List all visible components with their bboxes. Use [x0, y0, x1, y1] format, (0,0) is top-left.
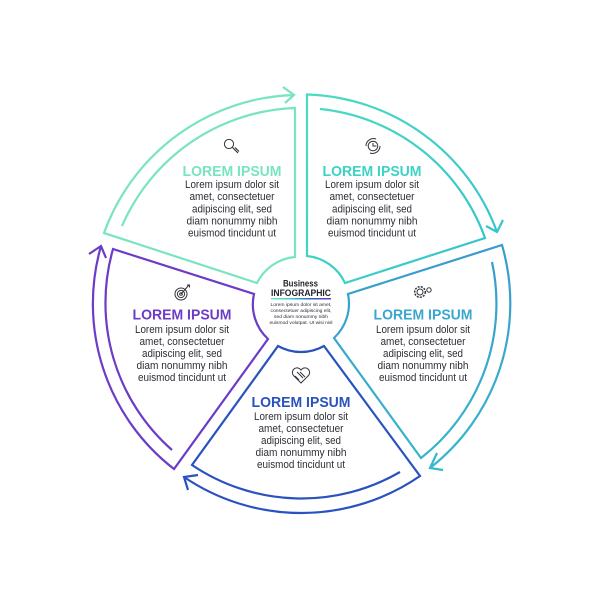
text block: segment 3: amet, consectetuer — [380, 336, 466, 348]
text block: segment 4 — [254, 411, 349, 471]
text block: segment 3: adipiscing elit, sed — [383, 348, 463, 360]
heading: segment 2: LOREM IPSUM — [322, 163, 422, 180]
panel: segment 4 — [184, 346, 420, 513]
text block: segment 4: euismod tincidunt ut — [257, 459, 346, 471]
heading: segment 1: LOREM IPSUM — [182, 163, 282, 180]
text block: segment 1: Lorem ipsum dolor sit — [185, 179, 280, 191]
heading: segment 4: LOREM IPSUM — [252, 394, 350, 411]
text block: segment 2 — [325, 179, 420, 240]
text block: segment 1: diam nonummy nibh — [186, 216, 278, 228]
text block: segment 1: amet, consectetuer — [190, 191, 275, 203]
text block: segment 3: diam nonummy nibh — [378, 360, 468, 372]
text block: segment 1 — [185, 179, 280, 240]
text block: segment 2: adipiscing elit, sed — [332, 204, 412, 216]
text block: segment 4: diam nonummy nibh — [256, 447, 346, 459]
text block: segment 5: diam nonummy nibh — [136, 360, 228, 372]
text block: segment 2: Lorem ipsum dolor sit — [325, 179, 420, 191]
text block: segment 5 — [135, 324, 230, 384]
text block: segment 4: Lorem ipsum dolor sit — [254, 411, 349, 423]
text block: segment 3: euismod tincidunt ut — [379, 372, 468, 384]
text block: segment 2: diam nonummy nibh — [326, 216, 418, 228]
heading: segment 5: LOREM IPSUM — [132, 306, 232, 324]
outline arrow: segment 5 — [89, 246, 268, 469]
text block: segment 4: amet, consectetuer — [258, 423, 344, 435]
panel: segment 3 — [334, 245, 510, 470]
gradient divider — [271, 298, 331, 300]
text block: segment 2: amet, consectetuer — [330, 191, 415, 203]
text block: center: Lorem ipsum dolor sit amet, — [270, 302, 332, 308]
text block: segment 5: adipiscing elit, sed — [142, 348, 222, 360]
outline arrow: segment 2 — [307, 94, 503, 283]
text block: segment 3: Lorem ipsum dolor sit — [376, 324, 471, 336]
text block: segment 1: euismod tincidunt ut — [188, 228, 277, 240]
heading: INFOGRAPHIC: INFOGRAPHIC — [271, 288, 331, 298]
icon: gears — [415, 287, 431, 297]
text block: segment 4: adipiscing elit, sed — [261, 435, 341, 447]
panel: segment 2 — [307, 94, 503, 283]
icon: target — [175, 285, 190, 300]
text block: center — [270, 302, 332, 326]
icon: clock cycle — [366, 139, 380, 153]
text block: segment 3 — [376, 324, 471, 384]
heading: Business: Business — [283, 278, 318, 288]
text block: center: euismod volutpat. Ut wisi nisl — [270, 320, 332, 326]
heading: segment 3: LOREM IPSUM — [374, 306, 472, 324]
outline arrow: segment 1 — [104, 87, 295, 283]
outline arrow: segment 3 — [334, 245, 510, 470]
text block: segment 5: Lorem ipsum dolor sit — [135, 324, 230, 336]
text block: segment 2: euismod tincidunt ut — [328, 228, 417, 240]
text block: segment 1: adipiscing elit, sed — [192, 204, 272, 216]
text block: center: sed diam nonummy nibh — [274, 314, 328, 320]
panel: segment 5 — [89, 246, 268, 469]
panel: center title — [270, 278, 332, 326]
icon: magnifier — [224, 139, 239, 153]
panel: segment 1 — [104, 87, 295, 283]
text block: segment 5: euismod tincidunt ut — [138, 372, 227, 384]
outline arrow: segment 4 — [184, 346, 420, 513]
text block: segment 5: amet, consectetuer — [140, 336, 225, 348]
icon: handshake heart — [292, 368, 310, 383]
text block: center: consectetuer adipiscing elit, — [270, 308, 332, 314]
